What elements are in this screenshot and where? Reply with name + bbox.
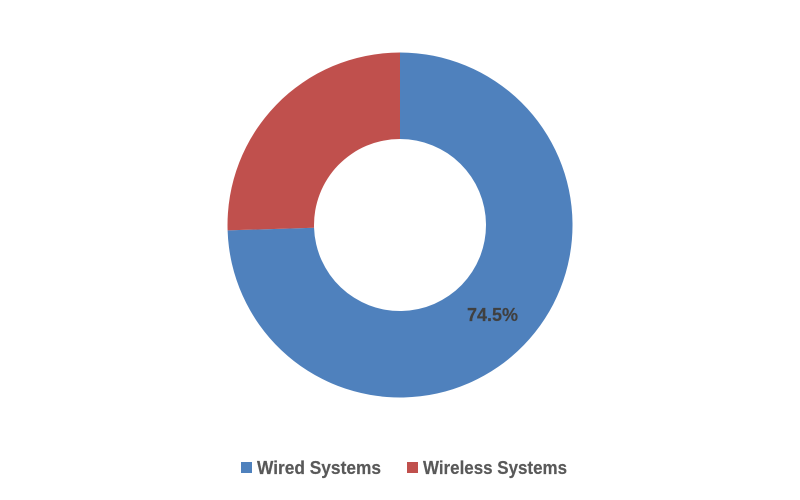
legend label: Wireless Systems: Wireless Systems [423, 458, 567, 478]
legend item: Wired Systems [241, 458, 381, 478]
swatch: Wired Systems [241, 462, 252, 473]
data label: 74.5%: 74.5% [467, 305, 518, 325]
legend item: Wireless Systems [407, 458, 567, 478]
segment: Wired Systems 74.5% [228, 52, 573, 398]
legend label: Wired Systems: Wired Systems [257, 458, 381, 478]
segment: Wireless Systems 25.5% [228, 52, 400, 230]
legend [241, 458, 567, 478]
donut chart [228, 52, 573, 398]
swatch: Wireless Systems [407, 462, 418, 473]
